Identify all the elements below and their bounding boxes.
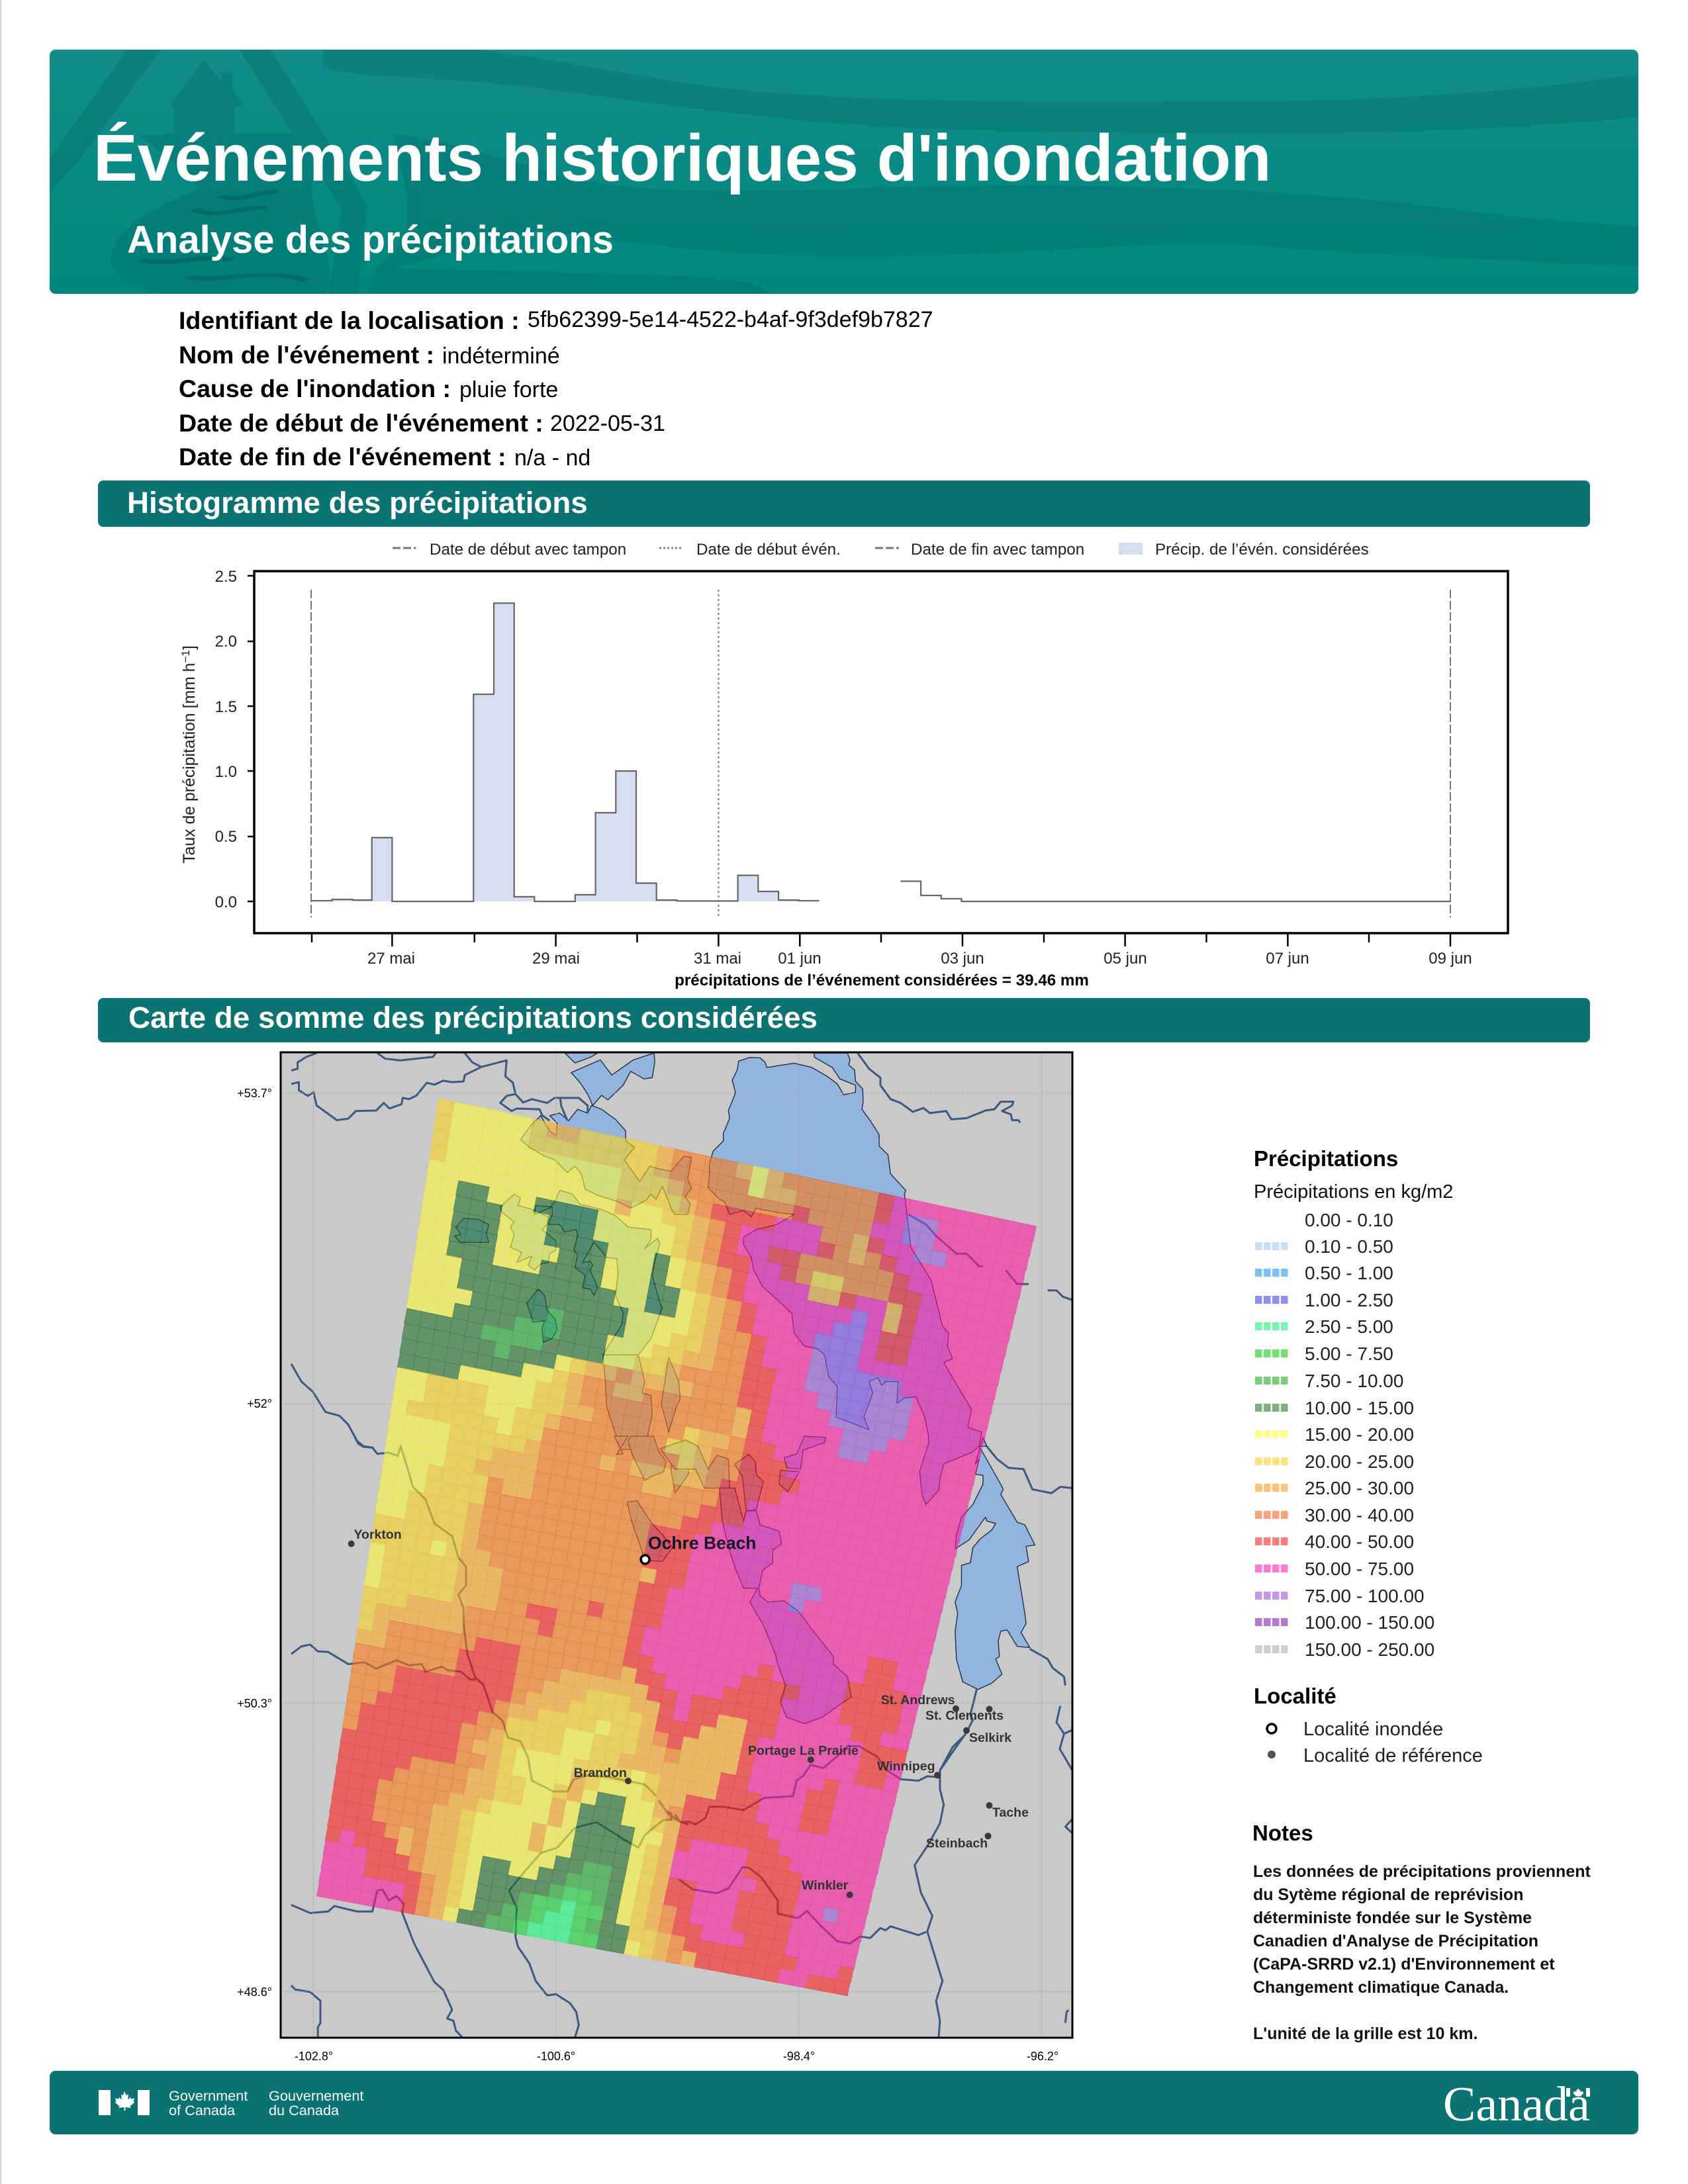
reference locality labels: St. Andrews: [881, 1693, 955, 1707]
legend class labels: 100.00 - 150.00: [1305, 1612, 1434, 1633]
government wordmark: Government: [169, 2087, 248, 2104]
x axis labels: [367, 950, 1472, 968]
government wordmark: du Canada: [269, 2102, 340, 2118]
graticule: [281, 1052, 1072, 2038]
Canada wordmark: Canada: [1443, 2077, 1590, 2132]
y axis labels: 2.5: [215, 568, 237, 586]
event metadata: indéterminé: [442, 343, 560, 369]
chart legend: Précip. de l’évén. considérées: [1155, 541, 1369, 559]
x axis labels: 09 jun: [1429, 950, 1472, 968]
event metadata: 5fb62399-5e14-4522-b4af-9f3def9b7827: [528, 307, 933, 332]
x axis labels: 03 jun: [941, 950, 984, 968]
latitude labels: +48.6°: [237, 1985, 272, 1999]
reference locality labels: Tache: [992, 1805, 1029, 1820]
latitude labels: +53.7°: [237, 1087, 272, 1100]
x axis labels: 07 jun: [1266, 950, 1309, 968]
x axis labels: 31 mai: [694, 950, 741, 968]
lakes: [455, 1053, 1035, 1723]
x axis labels: 27 mai: [367, 950, 415, 968]
footer band: [50, 2071, 1638, 2134]
event metadata: Cause de l'inondation :: [179, 375, 451, 402]
section bar: map: [98, 998, 1590, 1042]
longitude labels: -100.6°: [537, 2050, 575, 2063]
legend class labels: [1305, 1210, 1434, 1660]
legend class labels: 7.50 - 10.00: [1305, 1371, 1403, 1391]
section bar: histogram: [98, 480, 1590, 527]
legend class labels: 40.00 - 50.00: [1305, 1531, 1414, 1552]
chart legend: [393, 541, 1369, 559]
reference locality labels: St. Clements: [925, 1709, 1004, 1723]
reference locality markers: [348, 1541, 993, 1898]
government wordmark: Gouvernement: [269, 2087, 363, 2104]
legend class labels: 0.50 - 1.00: [1305, 1263, 1393, 1283]
reference locality labels: Steinbach: [926, 1837, 988, 1851]
reference locality labels: Winkler: [802, 1878, 849, 1893]
event metadata: Date de début de l'événement :: [179, 409, 543, 437]
y axis title: Taux de précipitation [mm h: [181, 663, 199, 864]
y axis labels: [215, 568, 237, 911]
flooded locality marker: [641, 1555, 649, 1564]
y axis labels: 1.0: [215, 763, 237, 781]
event metadata: 2022-05-31: [550, 411, 665, 436]
section bar: map: Carte de somme des précipitations considérées: [128, 1001, 818, 1034]
legend: locality: Localité: [1254, 1684, 1336, 1708]
precipitation histogram chart: [179, 541, 1508, 989]
legend swatches: [1255, 1246, 1289, 1649]
notes: du Sytème régional de reprévision: [1253, 1886, 1523, 1904]
notes: Canadien d'Analyse de Précipitation: [1253, 1932, 1538, 1950]
legend class labels: 150.00 - 250.00: [1305, 1639, 1434, 1660]
legend class labels: 0.00 - 0.10: [1305, 1210, 1393, 1230]
legend class labels: 25.00 - 30.00: [1305, 1478, 1414, 1498]
longitude labels: [295, 2050, 1058, 2063]
longitude labels: -98.4°: [783, 2050, 815, 2063]
y axis labels: 0.0: [215, 893, 237, 911]
y axis labels: 0.5: [215, 828, 237, 846]
event metadata: pluie forte: [459, 377, 558, 402]
event metadata: Date de fin de l'événement :: [179, 443, 506, 471]
reference locality labels: [353, 1527, 1029, 1893]
legend class labels: 30.00 - 40.00: [1305, 1505, 1414, 1525]
plot frame: [254, 571, 1508, 933]
y axis title: ]: [181, 645, 199, 650]
title: Événements historiques d'inondation: [93, 121, 1272, 195]
y axis labels: 1.5: [215, 698, 237, 716]
y axis labels: 2.0: [215, 633, 237, 651]
legend class labels: 1.00 - 2.50: [1305, 1290, 1393, 1310]
y axis title: −1: [179, 650, 192, 663]
legend: precipitation: [1254, 1146, 1453, 1660]
event metadata: Nom de l'événement :: [179, 341, 434, 369]
flooded locality label: Ochre Beach: [648, 1533, 756, 1553]
legend: precipitation: Précipitations en kg/m2: [1254, 1181, 1453, 1203]
legend class labels: 0.10 - 0.50: [1305, 1236, 1393, 1257]
legend class labels: 20.00 - 25.00: [1305, 1451, 1414, 1472]
event date lines: [311, 590, 1450, 917]
precipitation grid cells: [318, 1106, 1035, 1989]
section bar: histogram: Histogramme des précipitations: [127, 486, 588, 520]
histogram step line: [312, 603, 1450, 901]
event metadata: n/a - nd: [514, 445, 590, 471]
notes: L'unité de la grille est 10 km.: [1253, 2025, 1477, 2043]
legend class labels: 2.50 - 5.00: [1305, 1316, 1393, 1337]
legend: precipitation: Précipitations: [1254, 1146, 1398, 1171]
subtitle: Analyse des précipitations: [127, 218, 614, 261]
x axis labels: 29 mai: [532, 950, 580, 968]
histogram fill: [312, 603, 820, 901]
page edge line: [0, 0, 1, 2184]
reference locality labels: Yorkton: [353, 1527, 402, 1542]
latitude labels: +52°: [247, 1397, 272, 1410]
axes ticks: [248, 576, 1450, 946]
notes: (CaPA-SRRD v2.1) d'Environnement et: [1253, 1955, 1555, 1974]
legend: locality: Localité inondée: [1303, 1719, 1443, 1740]
icon: Canada flag: [99, 2090, 150, 2115]
reference locality labels: Winnipeg: [877, 1759, 935, 1774]
map background: [281, 1052, 1072, 2038]
legend: locality: [1254, 1684, 1483, 1766]
event metadata: [179, 306, 933, 471]
reference locality labels: Brandon: [574, 1766, 627, 1780]
chart legend: Date de début avec tampon: [430, 541, 626, 559]
total caption: précipitations de l’événement considérées = 39.46 mm: [675, 972, 1089, 989]
precipitation map: [237, 1052, 1072, 2063]
longitude labels: -96.2°: [1027, 2050, 1058, 2063]
legend class labels: 50.00 - 75.00: [1305, 1559, 1414, 1579]
notes: déterministe fondée sur le Système: [1253, 1909, 1532, 1927]
header banner: [50, 50, 1647, 295]
rivers and boundaries: [291, 1053, 1072, 2037]
notes: Changement climatique Canada.: [1253, 1978, 1509, 1997]
latitude labels: +50.3°: [237, 1697, 272, 1710]
x axis labels: 01 jun: [778, 950, 821, 968]
legend class labels: 15.00 - 20.00: [1305, 1424, 1414, 1445]
legend class labels: 5.00 - 7.50: [1305, 1343, 1393, 1364]
government wordmark: of Canada: [169, 2102, 236, 2118]
notes: Les données de précipitations proviennent: [1253, 1862, 1591, 1881]
latitude labels: [237, 1087, 272, 1999]
map frame: [281, 1052, 1072, 2038]
chart legend: Date de début évén.: [696, 541, 841, 559]
reference locality labels: Selkirk: [969, 1731, 1011, 1745]
legend class labels: 10.00 - 15.00: [1305, 1398, 1414, 1418]
event metadata: Identifiant de la localisation :: [179, 306, 520, 334]
x axis labels: 05 jun: [1103, 950, 1147, 968]
longitude labels: -102.8°: [295, 2050, 333, 2063]
government wordmark: [169, 2087, 363, 2118]
notes: [1252, 1821, 1591, 2043]
legend class labels: 75.00 - 100.00: [1305, 1586, 1425, 1606]
reference locality labels: Portage La Prairie: [748, 1743, 859, 1758]
notes: Notes: [1252, 1821, 1313, 1845]
legend: locality: Localité de référence: [1303, 1745, 1483, 1766]
chart legend: Date de fin avec tampon: [911, 541, 1084, 559]
